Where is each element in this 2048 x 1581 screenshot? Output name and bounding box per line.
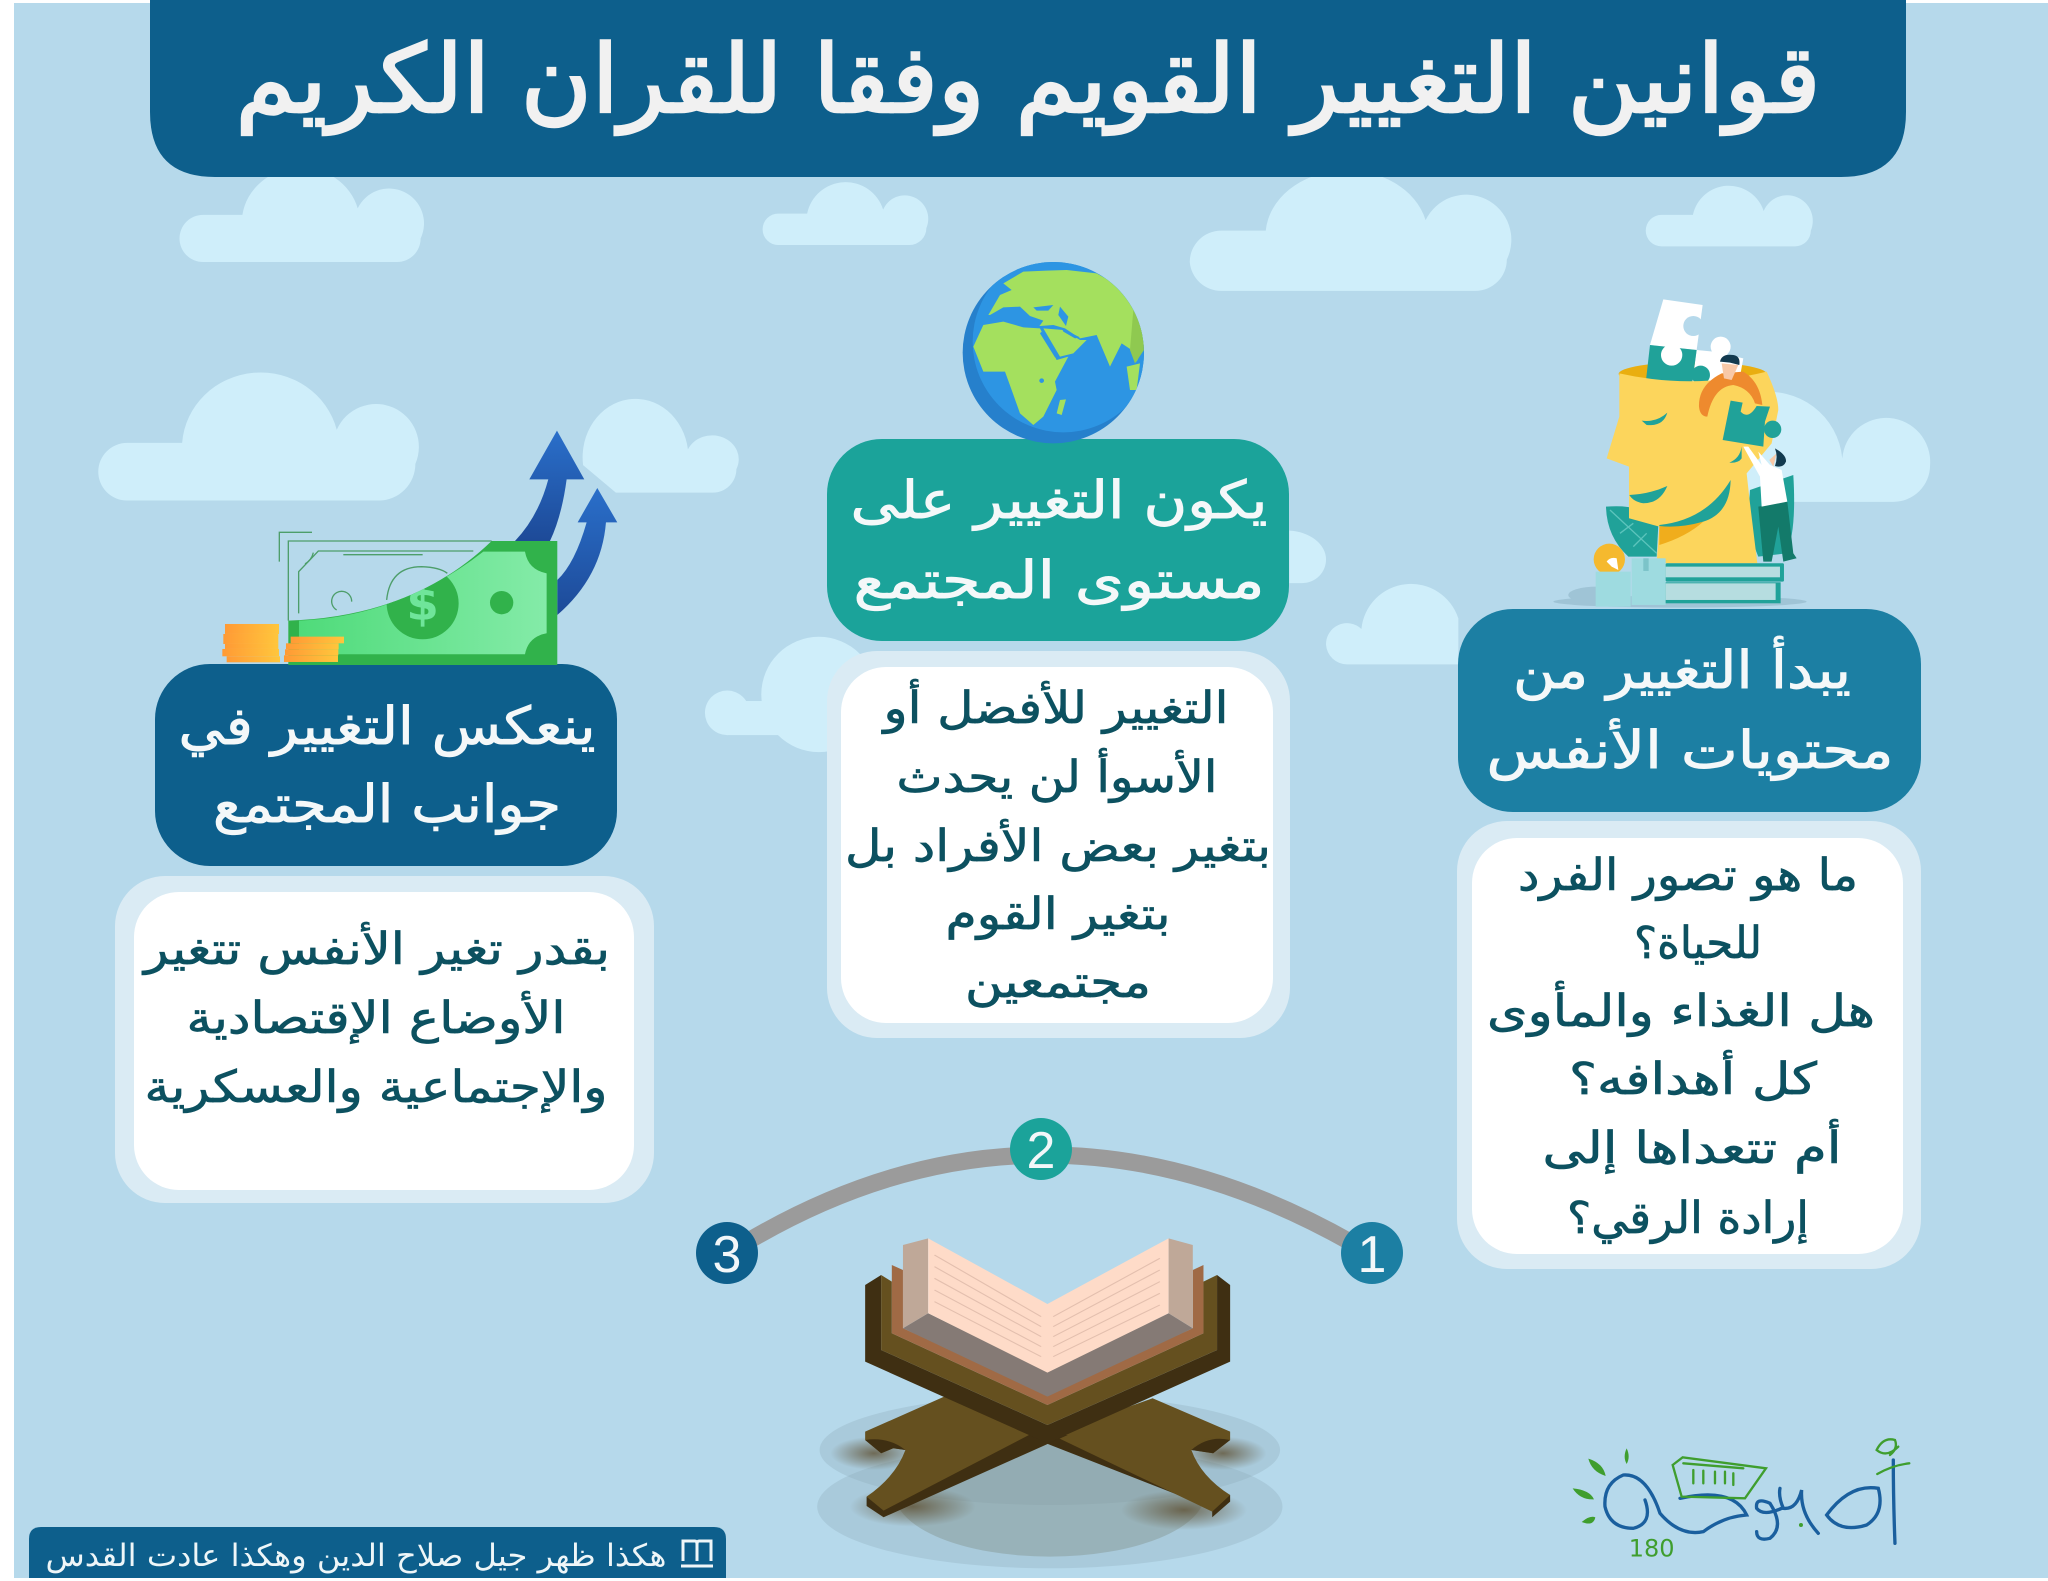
clouds <box>98 168 1930 752</box>
stand top <box>865 1275 1230 1443</box>
person on top <box>1699 355 1762 417</box>
boxes <box>1596 572 1631 607</box>
right text card: هل الغذاء والمأوى <box>1487 980 1875 1037</box>
left text card: بقدر تغير الأنفس تتغير <box>142 921 610 975</box>
coins <box>222 624 344 662</box>
center text card: بتغير القوم <box>946 889 1170 940</box>
title banner <box>150 0 1906 177</box>
held puzzle piece <box>1723 401 1770 447</box>
center heading: يكون التغيير على <box>850 471 1268 531</box>
panel: left column step 3 <box>115 664 654 1203</box>
step 2 marker <box>1010 1118 1072 1180</box>
icon: globe <box>962 262 1144 444</box>
center text card: مجتمعين <box>965 957 1151 1008</box>
logo: 180 <box>1629 1535 1675 1563</box>
title text: قوانين التغيير القويم وفقا للقران الكريم <box>236 26 1820 135</box>
stand legs <box>865 1397 1230 1517</box>
step 3 marker: 3 <box>713 1226 741 1284</box>
right text card: كل أهدافه؟ <box>1569 1050 1817 1105</box>
head <box>1607 372 1778 563</box>
leaves <box>1749 475 1794 557</box>
center heading: مستوى المجتمع <box>854 551 1264 611</box>
icon: quran on wooden stand <box>817 1238 1282 1568</box>
left heading <box>155 664 617 866</box>
right heading: يبدأ التغيير من <box>1513 636 1851 701</box>
arrows <box>515 431 617 615</box>
panel: center column step 2 <box>827 439 1290 1038</box>
logo <box>1573 1439 1909 1563</box>
book cover <box>892 1265 1203 1405</box>
left text card: والإجتماعية والعسكرية <box>144 1062 608 1113</box>
panel: right column step 1 <box>1457 609 1921 1269</box>
icon: money with rising arrows <box>222 431 617 665</box>
right text card: للحياة؟ <box>1634 918 1762 969</box>
center text card: بتغير بعض الأفراد بل <box>845 818 1271 872</box>
left heading: ينعكس التغيير في <box>178 697 596 757</box>
bulb <box>1594 544 1625 575</box>
left heading: جوانب المجتمع <box>213 775 561 835</box>
right text card: ما هو تصور الفرد <box>1518 850 1858 901</box>
right heading: محتويات الأنفس <box>1486 718 1894 781</box>
arc connector <box>745 1155 1352 1243</box>
step 1 marker <box>1341 1222 1403 1284</box>
icon: money with rising arrows: $ <box>406 578 439 632</box>
right text card <box>1457 821 1921 1269</box>
center text card: التغيير للأفضل أو <box>881 679 1228 734</box>
person climbing <box>1743 447 1797 562</box>
shadows <box>820 1395 1280 1505</box>
books <box>1666 563 1784 582</box>
center text card <box>827 651 1290 1038</box>
left text card: الأوضاع الإقتصادية <box>186 990 566 1044</box>
step 1 marker: 1 <box>1358 1226 1386 1284</box>
icon: open book <box>681 1541 713 1566</box>
ground shadow <box>1553 596 1807 608</box>
right text card: إرادة الرقي؟ <box>1567 1193 1809 1244</box>
bill outline <box>279 532 492 621</box>
right text card: أم تتعداها إلى <box>1542 1119 1842 1174</box>
center heading <box>827 439 1289 641</box>
head back rim <box>1619 362 1767 386</box>
right heading <box>1458 609 1921 812</box>
puzzle pieces in head <box>1646 299 1743 387</box>
step 2 marker: 2 <box>1027 1122 1055 1180</box>
step 3 marker <box>696 1222 758 1284</box>
left text card <box>115 876 654 1203</box>
source bar <box>29 1527 726 1578</box>
icon: head with puzzle pieces <box>1553 299 1807 608</box>
source bar: هكذا ظهر جيل صلاح الدين وهكذا عادت القدس <box>46 1538 666 1574</box>
bill body <box>288 541 557 665</box>
center text card: الأسوأ لن يحدث <box>896 748 1218 803</box>
